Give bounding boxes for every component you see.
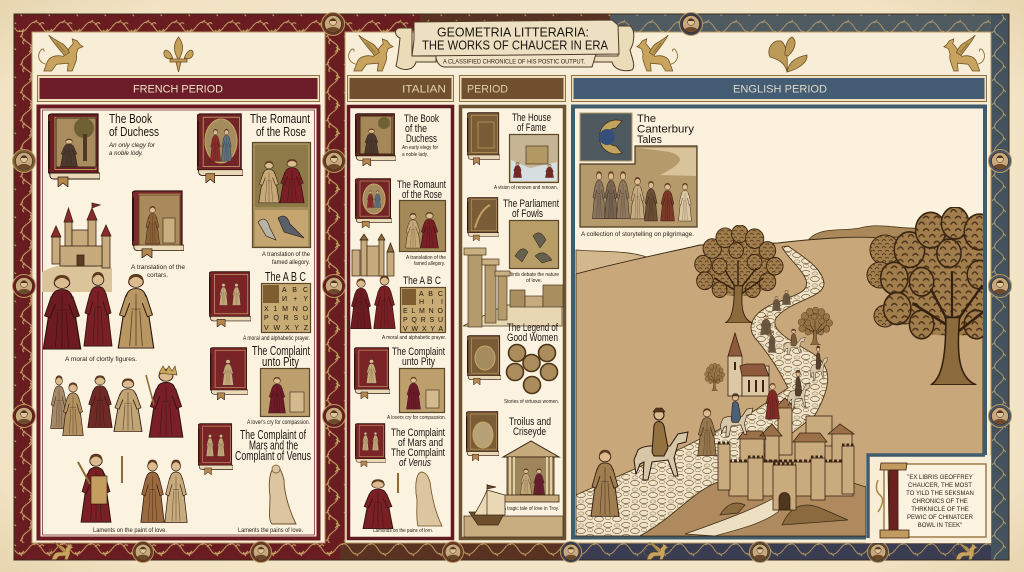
work: The Book of Duchess (48, 112, 159, 187)
title text: GEOMETRIA LITTERARIA: (437, 24, 589, 40)
stream below town (684, 498, 779, 536)
panel: Period column (460, 106, 564, 538)
work: The Legend of Good Women: Good Women (507, 332, 558, 344)
work: The Book of Duchess: of Duchess (109, 125, 159, 139)
work: The A B C: P Q R S U (403, 317, 443, 324)
work: The House of Fame: of Fame (517, 122, 546, 134)
griffin: Italian (349, 35, 393, 71)
callout text: PEWIC OF CHINATCER (907, 515, 974, 521)
scroll curl left (396, 28, 436, 69)
work: The Canterbury Tales: Tales (637, 134, 662, 146)
oak leaf sprig (769, 37, 807, 72)
work: The House of Fame: A vision of renown and renown. (494, 185, 558, 191)
work: The Complaint of Mars and the Complaint of Venus (198, 424, 311, 534)
work: The A B C: V W X Y Z (264, 325, 309, 332)
work: The Book of the Duchess: a noble lady. (402, 152, 428, 158)
work: The House of Fame: The House (512, 112, 551, 124)
griffin: French (39, 35, 83, 71)
frame: Italian brown border (340, 14, 610, 560)
illustration: columns and piazza (463, 248, 563, 327)
work: The Book of the Duchess: Duchess (406, 133, 437, 145)
work: The A B C (209, 270, 310, 342)
work: The Book of the Duchess: An early elegy for (402, 145, 438, 151)
callout text: CHAUCER, THE MOST (908, 483, 972, 489)
banner: Italian: ITALIAN (402, 84, 446, 96)
work: The A B C: H I I (419, 299, 443, 306)
work: The Complaint of Mars and the Complaint of Venus: Mars and the (249, 438, 298, 452)
work: The Complaint unto Pity (354, 346, 446, 421)
work: The Complaint unto Pity: The Complaint (252, 344, 310, 358)
callout text: "EX LIBRIS GEOFFREY (907, 475, 973, 481)
title plate (412, 20, 619, 56)
callout text: TO YILD THE SEKSMAN (906, 491, 974, 497)
work: The Complaint unto Pity: unto Pity (262, 355, 300, 369)
pilgrim picture (580, 146, 697, 227)
winding cobbled road (576, 246, 828, 536)
panel: French period (38, 106, 318, 538)
work: The Parliament of Fowls: The Parliament (503, 198, 559, 210)
banner: Period (460, 76, 566, 102)
work: The A B C: X 1 M N O (264, 306, 309, 313)
banner: Period: PERIOD (467, 84, 508, 96)
callout text: CHRONICS OF THE (912, 499, 968, 505)
callout frame (884, 464, 986, 537)
work: The A B C: A moral and alphabetic prayer. (382, 335, 446, 341)
work: Troilus and Criseyde: A tragic tale of love in Troy. (503, 506, 559, 512)
work: The Romaunt of the Rose: of the Rose (402, 189, 442, 201)
work: The A B C: И + Y (282, 296, 308, 303)
large left oak (695, 225, 783, 323)
panel: English period (573, 106, 1024, 543)
griffin: English right (944, 35, 985, 71)
work: The Complaint of Mars and the Complaint of Venus: Complaint of Venus (235, 449, 311, 463)
work: The Complaint of Mars and The Complaint of Venus: of Venus (399, 457, 431, 469)
work: The Parliament of Fowls: of love. (526, 278, 542, 284)
work: The Romaunt of the Rose: The Romaunt (397, 179, 446, 191)
work: The Complaint unto Pity: A lovers cry for compassion. (387, 415, 446, 421)
illustration: castle on hill (42, 203, 112, 292)
work: The A B C: P Q R S U (264, 315, 308, 322)
work: The Legend of Good Women (467, 322, 559, 405)
work: The Complaint unto Pity: The Complaint (392, 346, 445, 358)
work: The A B C (382, 275, 446, 341)
work: Troilus and Criseyde: Criseyde (513, 426, 546, 438)
work: The A B C: A B C (282, 287, 308, 294)
work: The Parliament of Fowls: of Fowls (512, 208, 543, 220)
banner: Italian (348, 76, 454, 102)
large right oak (866, 207, 983, 385)
callout text (906, 475, 974, 529)
work: The A B C: The A B C (265, 270, 306, 284)
frame: English blue border (570, 14, 1009, 560)
banner: French Period (38, 76, 320, 102)
far left hill (576, 250, 647, 274)
work: The Complaint of Mars and The Complaint of Venus (355, 424, 445, 534)
work: The Canterbury Tales (580, 113, 697, 238)
illuminated initial I (876, 463, 909, 538)
callout text: BOWL IN TEEK" (918, 523, 962, 529)
callout text: THRKNICLE OF THE (911, 507, 969, 513)
work: The Complaint unto Pity: unto Pity (402, 356, 435, 368)
small tree by road (798, 307, 833, 345)
subtitle ribbon (436, 54, 596, 67)
work: The Book of Duchess: An only clegy for (108, 142, 156, 149)
bushes (720, 503, 848, 525)
work description: A collection of storytelling on pilgrimage. (581, 231, 694, 238)
banner: English Period (572, 76, 986, 102)
illustration: three courtly figures (43, 272, 154, 363)
work: The Complaint of Mars and The Complaint of Venus: Lamonds on the pains of lorn. (373, 528, 433, 534)
work: The A B C: A B C (419, 291, 443, 298)
title scroll (396, 20, 634, 71)
work: The Parliament of Fowls (467, 198, 559, 284)
banner: English Period: ENGLISH PERIOD (733, 84, 827, 96)
town hill (640, 482, 866, 536)
work: The Romaunt of the Rose (355, 179, 446, 267)
panel: Italian period (348, 106, 452, 538)
work: The House of Fame (467, 112, 558, 191)
griffin: English left (637, 35, 678, 71)
frame: French red border (14, 14, 345, 560)
illustration: ship on water (464, 484, 563, 537)
work: The Complaint of Mars and The Complaint of Venus: The Complaint (391, 447, 445, 459)
illustration: figures in conversation (51, 366, 183, 437)
work: The Parliament of Fowls: Birds debate the nature (509, 272, 559, 278)
church (728, 333, 769, 396)
illustration: castle (352, 234, 394, 276)
work: The Complaint of Mars and the Complaint of Venus: Laments the pains of love. (238, 527, 303, 534)
work: The Romaunt of the Rose: A translation of the (406, 255, 446, 261)
work: The Romaunt of the Rose: A translation of the (262, 251, 310, 258)
illustration: Canterbury landscape (576, 207, 1024, 536)
work: The A B C: V W X Y A (403, 326, 443, 333)
work: The A B C: The A B C (403, 275, 441, 287)
work: The Romaunt of the Rose: famed allegory. (414, 261, 445, 267)
scroll curl right (594, 26, 634, 71)
pilgrims walking (591, 290, 791, 516)
work: The Canterbury Tales: Canterbury (637, 124, 695, 136)
small tree by church (705, 363, 725, 391)
work: book with translation note: cortars. (147, 272, 168, 279)
work: The Book of the Duchess: The Book (404, 113, 439, 125)
callout: Ex Libris (866, 455, 991, 543)
illustration: three courtly figures: A moral of clortly figures. (65, 356, 137, 363)
subtitle: A CLASSIFIED CHRONICLE OF HIS POSTIC OUTPUT. (443, 58, 585, 66)
work title: The (637, 113, 656, 125)
title text line 2: THE WORKS OF CHAUCER IN ERA (422, 38, 608, 52)
work: book with translation note: A translation of the (131, 264, 185, 271)
main hill (576, 232, 983, 536)
banner: French Period: FRENCH PERIOD (133, 84, 223, 96)
illustration: soldier and two men (78, 454, 187, 534)
work: The Legend of Good Women: The Legend of (507, 322, 559, 334)
work: The Complaint of Mars and the Complaint of Venus: The Complaint of (240, 428, 306, 442)
work: The Legend of Good Women: Stories of virtuous women. (504, 399, 559, 405)
work: The Romaunt of the Rose: famed allegory. (272, 259, 310, 266)
work: Troilus and Criseyde: Troilus and (509, 416, 551, 428)
work: The Book of the Duchess (355, 113, 439, 166)
work: The Romaunt of the Rose: of the Rose (256, 125, 306, 139)
work: book with translation note (131, 191, 185, 279)
illustration: courtly figures (351, 275, 395, 329)
work: The Romaunt of the Rose: The Romaunt (250, 112, 310, 126)
work: The A B C: E L M N O (403, 308, 444, 315)
walled town (718, 398, 854, 510)
pilgrims on horseback (634, 329, 827, 480)
work: The Book of Duchess: a noble lòdy. (109, 150, 143, 157)
inner parchment: French (32, 32, 325, 543)
work: The Complaint of Mars and The Complaint of Venus: The Complaint (391, 427, 445, 439)
inner parchment: Italian and English (345, 32, 991, 543)
far right wooded hills (808, 225, 915, 240)
work: Troilus and Criseyde (466, 412, 559, 512)
work: The Complaint unto Pity (210, 344, 310, 426)
work: The A B C: A moral and alphabetic prayer. (243, 335, 310, 342)
work: The Book of Duchess: The Book (109, 112, 153, 126)
work: The Book of the Duchess: of the (405, 123, 427, 135)
illuminated initial C (580, 113, 632, 161)
illustration: soldier and two men: Laments on the paint of love. (93, 527, 167, 534)
work: The Complaint of Mars and The Complaint of Venus: of Mars and (398, 437, 443, 449)
work: The Romaunt of the Rose (197, 112, 310, 266)
fleur-de-lis (164, 37, 193, 72)
work: The Complaint unto Pity: A lover's cry for compassion. (247, 419, 310, 426)
